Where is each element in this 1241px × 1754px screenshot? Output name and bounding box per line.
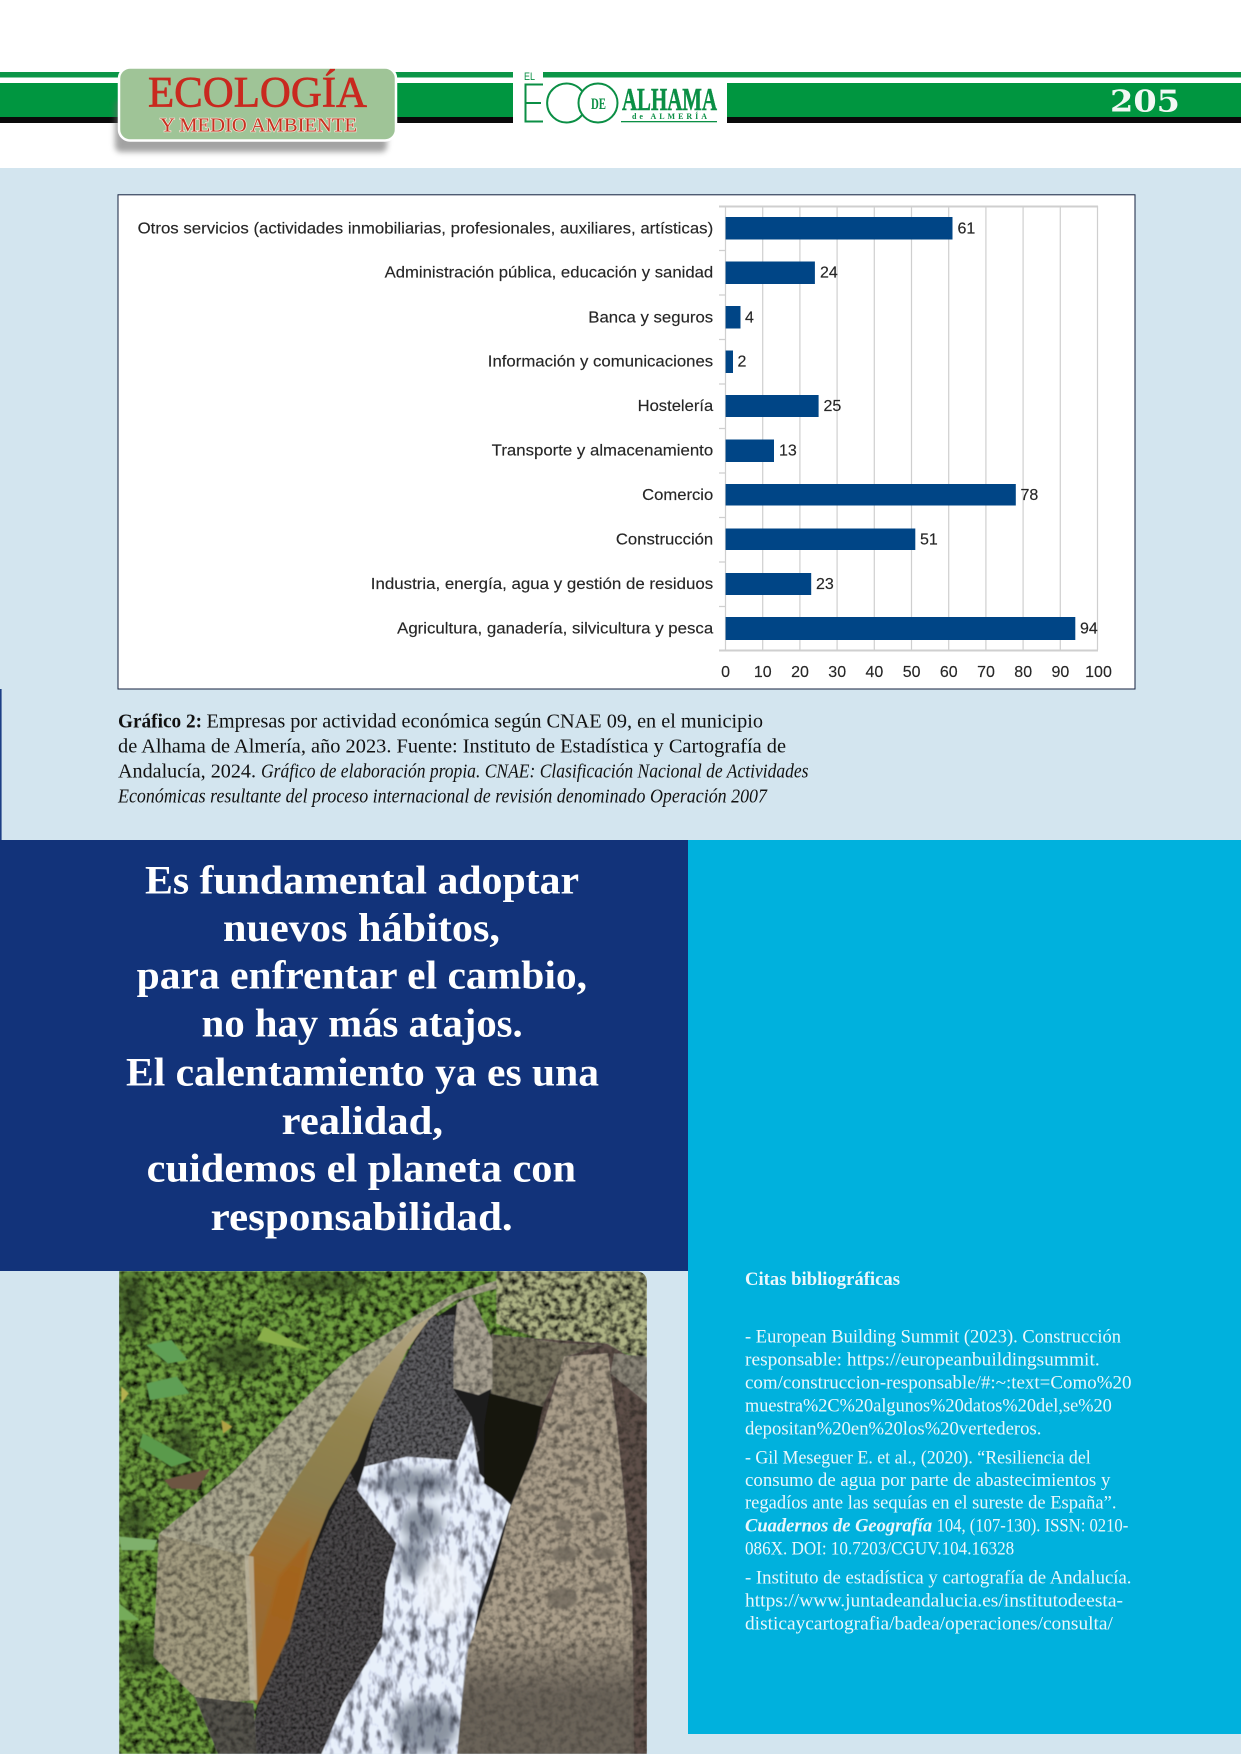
section badge: Ecología y medio ambiente xyxy=(115,68,396,152)
panel: quote: cuidemos el planeta con xyxy=(147,1146,576,1191)
reference 3: https://www.juntadeandalucia.es/institutodeesta- xyxy=(745,1591,1123,1612)
chart caption xyxy=(117,711,809,808)
logo: El Eco de Alhama de Almería: EL xyxy=(524,71,535,83)
chart caption: Andalucía, 2024. xyxy=(118,761,256,783)
chart caption: Económicas resultante del proceso internacional de revisión denominado Operación 2007 xyxy=(117,786,768,808)
category labels: Transporte y almacenamiento xyxy=(492,443,713,460)
reference 1: - European Building Summit (2023). Construcción xyxy=(745,1327,1121,1348)
references heading: Citas bibliográficas xyxy=(745,1269,900,1290)
panel: quote: no hay más atajos. xyxy=(202,1001,523,1046)
grey rock in channel xyxy=(364,1315,479,1467)
transverse wall xyxy=(491,1334,602,1407)
category labels: Administración pública, educación y sanidad xyxy=(385,265,713,282)
reference 1 xyxy=(745,1327,1132,1440)
x axis labels: 60 xyxy=(940,664,958,681)
x axis labels: 90 xyxy=(1052,664,1069,681)
panel: references background xyxy=(688,840,1241,1734)
x axis labels: 50 xyxy=(903,664,921,681)
x axis labels: 0 xyxy=(721,664,730,681)
right wall xyxy=(457,1353,634,1754)
category labels: Otros servicios (actividades inmobiliarias, profesionales, auxiliares, artísticas) xyxy=(138,220,713,237)
chart caption: Empresas por actividad económica según CNAE 09, en el municipio xyxy=(206,711,763,733)
dark channel base xyxy=(250,1303,543,1754)
logo: El Eco de Alhama de Almería: ALHAMA xyxy=(622,81,717,117)
x axis labels: 30 xyxy=(828,664,846,681)
chart caption: de Alhama de Almería, año 2023. Fuente: Instituto de Estadística y Cartografía de xyxy=(118,736,786,758)
reference 1: responsable: https://europeanbuildingsummit. xyxy=(745,1349,1100,1370)
panel: quote: realidad, xyxy=(282,1098,443,1143)
value labels: 94 xyxy=(1080,620,1098,637)
chart bars xyxy=(726,217,1075,640)
section badge: Ecología y medio ambiente: ECOLOGÍA xyxy=(148,70,367,116)
value labels: 51 xyxy=(920,531,938,548)
value labels xyxy=(738,220,1098,637)
x axis labels: 70 xyxy=(977,664,995,681)
panel: quote: Es fundamental adoptar xyxy=(145,857,579,902)
far right vegetation xyxy=(496,1271,647,1360)
vegetation xyxy=(116,1271,647,1754)
value labels: 13 xyxy=(779,443,797,460)
water xyxy=(321,1420,511,1754)
category labels: Hostelería xyxy=(638,398,713,415)
reference 3: - Instituto de estadística y cartografía de Andalucía. xyxy=(745,1567,1132,1588)
page number: 205 xyxy=(1110,84,1180,120)
reference 2: consumo de agua por parte de abastecimientos y xyxy=(745,1470,1111,1491)
value labels: 4 xyxy=(745,309,754,326)
panel: quote: El calentamiento ya es una xyxy=(126,1050,599,1095)
reference 3: disticaycartografia/badea/operaciones/consulta/ xyxy=(745,1613,1114,1634)
category labels: Construcción xyxy=(616,531,713,548)
x axis labels xyxy=(721,664,1112,681)
category labels: Industria, energía, agua y gestión de residuos xyxy=(371,576,713,593)
category labels: Agricultura, ganadería, silvicultura y pesca xyxy=(397,620,713,637)
left wall inner face xyxy=(248,1300,452,1705)
category labels: Banca y seguros xyxy=(588,309,713,326)
value labels: 61 xyxy=(958,220,975,237)
panel: quote xyxy=(0,840,688,1271)
reference 2: - Gil Meseguer E. et al., (2020). “Resiliencia del xyxy=(745,1447,1091,1468)
photo: stone irrigation channel with rushing water xyxy=(119,1271,647,1754)
category labels: Comercio xyxy=(642,487,713,504)
right ground xyxy=(490,1334,647,1754)
dark left rock xyxy=(250,1473,396,1754)
value labels: 25 xyxy=(824,398,841,415)
reference 2: regadíos ante las sequías en el sureste de España”. xyxy=(745,1493,1116,1514)
reference 1: depositan%20en%20los%20vertederos. xyxy=(745,1419,1041,1440)
category labels xyxy=(138,220,713,637)
panel: references text xyxy=(745,1269,1132,1634)
x axis labels: 100 xyxy=(1085,664,1112,681)
rubble at wall foot xyxy=(195,1697,257,1754)
logo: El Eco de Alhama de Almería xyxy=(524,71,717,122)
standing slab xyxy=(454,1296,492,1395)
header band xyxy=(0,70,1241,126)
dark opening xyxy=(484,1393,545,1502)
category labels: Información y comunicaciones xyxy=(488,354,713,371)
left edge rule xyxy=(0,689,2,840)
reference 1: com/construccion-responsable/#:~:text=Como%20 xyxy=(745,1373,1132,1394)
reference 1: muestra%2C%20algunos%20datos%20del,se%20 xyxy=(745,1396,1112,1417)
end face light edge xyxy=(245,1555,257,1700)
chart caption: Gráfico 2: xyxy=(118,711,202,733)
reference 2: 104, (107-130). ISSN: 0210- xyxy=(936,1516,1128,1537)
x axis labels: 20 xyxy=(791,664,809,681)
x axis labels: 40 xyxy=(866,664,883,681)
reference 2: Cuadernos de Geografía xyxy=(745,1516,933,1537)
x axis labels: 10 xyxy=(754,664,772,681)
section badge: Ecología y medio ambiente: Y MEDIO AMBIENTE xyxy=(160,114,357,136)
reference 3 xyxy=(745,1567,1132,1634)
logo: El Eco de Alhama de Almería: DE xyxy=(591,96,606,113)
panel: quote: para enfrentar el cambio, xyxy=(137,952,587,997)
left wall top xyxy=(159,1281,496,1557)
value labels: 78 xyxy=(1020,487,1038,504)
chart caption: Gráfico de elaboración propia. CNAE: Clasificación Nacional de Actividades xyxy=(261,761,809,783)
x axis labels: 80 xyxy=(1014,664,1032,681)
panel: quote: nuevos hábitos, xyxy=(223,905,500,950)
reference 2: 086X. DOI: 10.7203/CGUV.104.16328 xyxy=(745,1538,1014,1559)
value labels: 2 xyxy=(738,354,746,371)
logo: El Eco de Alhama de Almería: de ALMERÍA xyxy=(632,111,707,121)
reference 2 xyxy=(745,1447,1128,1559)
panel: quote: responsabilidad. xyxy=(211,1194,513,1239)
value labels: 23 xyxy=(816,576,834,593)
value labels: 24 xyxy=(820,265,838,282)
left wall end face xyxy=(154,1534,255,1703)
panel: bar chart xyxy=(118,195,1135,689)
